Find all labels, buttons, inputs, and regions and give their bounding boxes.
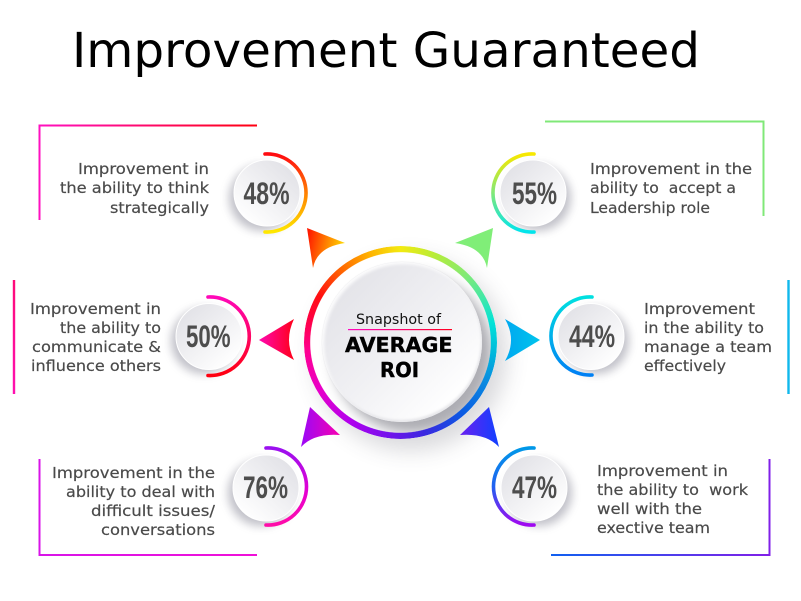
badge: 50%: 50%	[186, 318, 230, 354]
text: difficult conversations: ability to deal with	[66, 483, 215, 501]
text: accept leadership: ability to accept a	[590, 179, 736, 197]
arrow: cyan	[505, 319, 540, 361]
text: accept leadership	[590, 160, 752, 217]
badge: 55%	[493, 154, 571, 232]
text: executive team: the ability to work	[597, 481, 748, 499]
badge: 76%: 76%	[243, 469, 288, 505]
text: communicate and influence: communicate &	[32, 338, 161, 356]
center text	[345, 312, 452, 382]
text: think strategically: Improvement in	[78, 160, 209, 178]
panel: 44% manage a team	[505, 280, 788, 394]
badge: 48%	[229, 154, 306, 232]
text: difficult conversations: Improvement in the	[52, 464, 215, 482]
center text: AVERAGE	[345, 333, 452, 357]
panel: 47% executive team	[460, 407, 770, 555]
text: difficult conversations: conversations	[101, 521, 215, 539]
arrow: pink	[259, 319, 294, 360]
text: think strategically: strategically	[110, 199, 209, 217]
badge: 44%	[551, 297, 629, 375]
arrow: green	[455, 228, 493, 268]
badge: 50%	[171, 297, 249, 376]
text: accept leadership: Leadership role	[590, 199, 710, 217]
text: executive team: well with the	[597, 500, 702, 518]
text: accept leadership: Improvement in the	[590, 160, 752, 178]
text: think strategically	[60, 160, 209, 217]
text: communicate and influence: Improvement in	[30, 300, 161, 318]
frame: middle right	[787, 280, 790, 394]
title: Improvement Guaranteed	[72, 23, 700, 79]
panel: 55% leadership role	[455, 122, 764, 268]
text: communicate and influence: the ability to	[60, 319, 161, 337]
frame: top left	[40, 126, 257, 220]
text: difficult conversations	[52, 464, 216, 539]
frame: middle left	[13, 280, 15, 394]
frame: bottom right	[551, 459, 770, 555]
frame: bottom left	[40, 459, 257, 555]
text: executive team: Improvement in	[597, 462, 728, 480]
arrow: purple	[301, 407, 340, 447]
badge: 55%: 55%	[512, 175, 557, 211]
text: executive team	[597, 462, 748, 537]
center text: ROI	[380, 358, 419, 382]
panel: 50% communicate	[14, 280, 294, 394]
text: manage team: manage a team	[644, 338, 772, 356]
badge: 76%	[228, 448, 307, 526]
text: communicate and influence	[30, 300, 161, 375]
center hub: average ROI	[304, 246, 514, 458]
badge: 47%	[493, 448, 572, 526]
badge: 48%: 48%	[244, 175, 290, 211]
text: difficult conversations: difficult issues/	[91, 502, 216, 520]
text: communicate and influence: influence others	[31, 357, 161, 375]
text: executive team: exective team	[597, 519, 710, 537]
panel: 76% difficult conversations	[40, 407, 340, 555]
center text: Snapshot of	[356, 312, 442, 328]
badge: 47%: 47%	[512, 469, 557, 505]
text: think strategically: the ability to think	[60, 179, 209, 197]
badge: 44%: 44%	[569, 318, 615, 354]
text: manage team	[644, 300, 772, 375]
panel: 48% strategic thinking	[40, 126, 345, 268]
text: manage team: Improvement	[644, 300, 755, 318]
arrow: blue	[460, 407, 499, 447]
frame: top right	[545, 122, 764, 216]
text: manage team: effectively	[644, 357, 726, 375]
arrow: orange	[307, 228, 345, 268]
text: manage team: in the ability to	[644, 319, 764, 337]
